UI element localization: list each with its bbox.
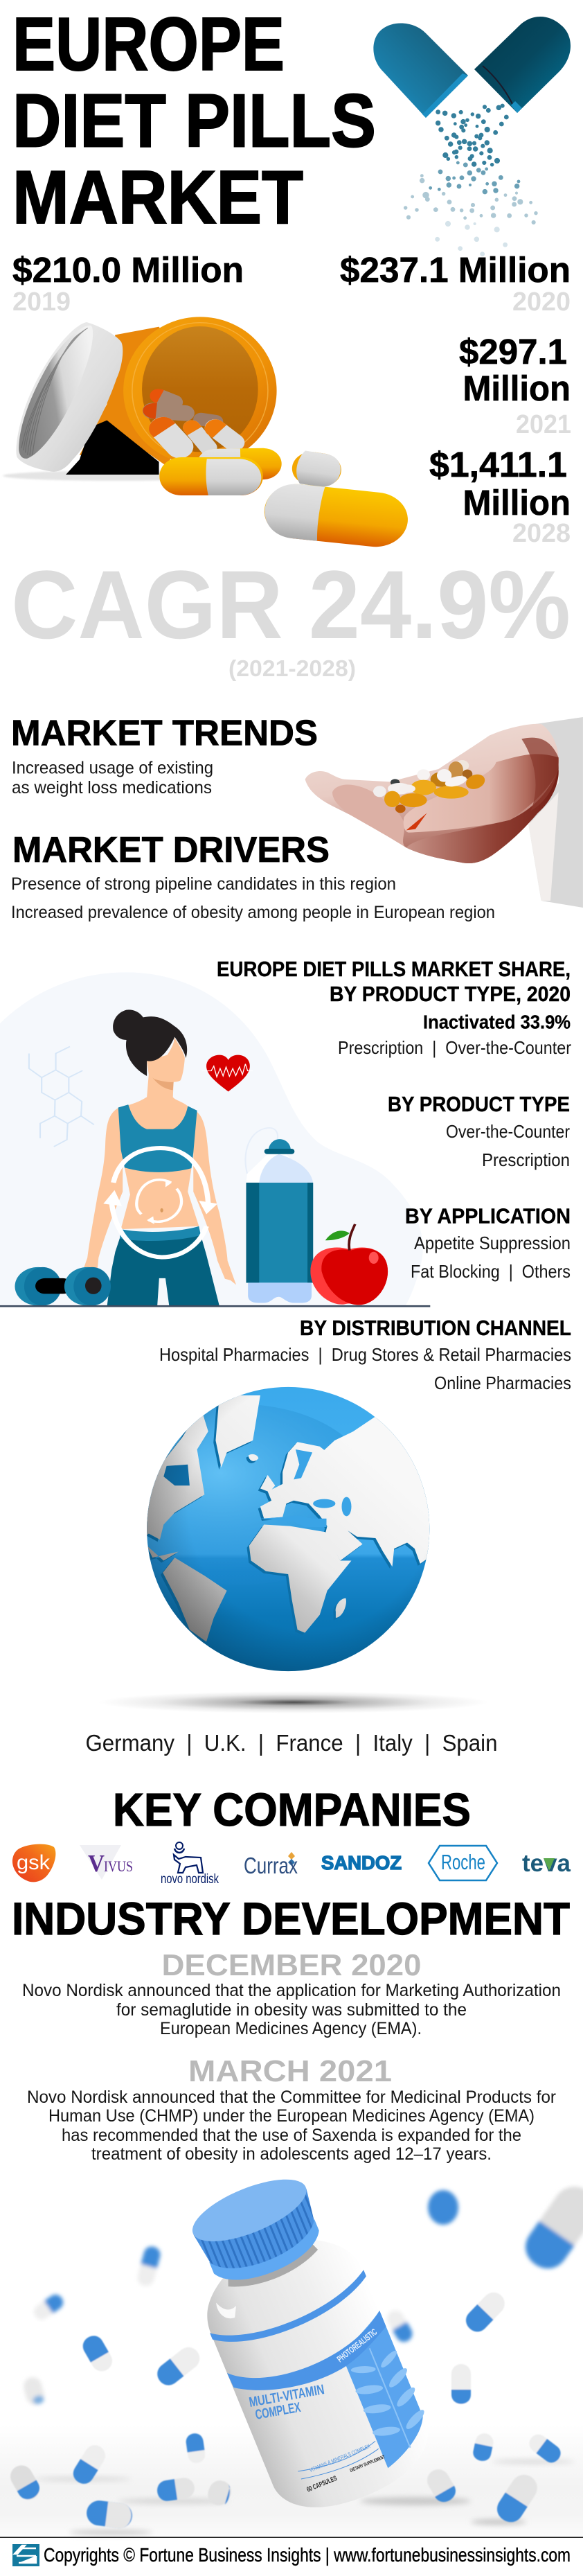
development: March 2021: Novo Nordisk announced that the Committee for Medicinal Products for (27, 2088, 556, 2107)
stat: 2019 value: $210.0 Million (12, 250, 244, 290)
photo: multi-vitamin bottle with scattered capsules: PHOTOREALISTIC (335, 2327, 379, 2364)
development: December 2020: Novo Nordisk announced that the application for Marketing Authorization (22, 1981, 561, 2000)
blurred capsules (21, 2178, 583, 2407)
development: December 2020: for semaglutide in obesity was submitted to the (116, 2000, 467, 2020)
pills in palm (373, 760, 487, 813)
development: December 2020 (22, 1948, 561, 2038)
heading: market trends: MARKET TRENDS (11, 714, 318, 754)
segment: by application (405, 1204, 571, 1282)
bottle: VITAMINS & MINERALS COMPLEX (309, 2443, 371, 2473)
stat: 2028 value: 2028 (512, 519, 571, 548)
development: March 2021: Human Use (CHMP) under the European Medicines Agency (EMA) (48, 2106, 535, 2126)
text: market drivers body: Increased prevalence of obesity among people in European region (11, 903, 495, 922)
heart with pulse (202, 1055, 253, 1092)
text: market drivers body: Presence of strong pipeline candidates in this region (11, 874, 396, 894)
apple (310, 1224, 388, 1305)
stat: 2028 value: Million (463, 483, 571, 522)
icon: open capsule spilling powder (373, 17, 571, 256)
text: market trends body (12, 758, 213, 797)
development: March 2021 (27, 2054, 556, 2164)
title: EUROPE (12, 2, 285, 87)
development: December 2020: DECEMBER 2020 (162, 1948, 421, 1982)
stat: 2021 value (459, 332, 571, 439)
small capsule (289, 449, 344, 489)
text: market trends body: as weight loss medications (12, 778, 212, 797)
bottle: 60 CAPSULES (306, 2475, 339, 2494)
segment: by distribution channel: Online Pharmacies (434, 1373, 571, 1393)
segment: by application: Appetite Suppression (414, 1233, 571, 1253)
stat: 2028 value (429, 445, 571, 548)
segment: by product type (388, 1092, 570, 1170)
capsules inside bottle (142, 387, 249, 463)
weight-loss arrows (103, 1148, 217, 1258)
woman figure (84, 1009, 236, 1306)
footer logo (12, 2544, 39, 2566)
logo: roche: Roche (441, 1850, 485, 1874)
text: share value: Inactivated 33.9% (423, 1012, 571, 1032)
segment: by product type: Prescription (482, 1149, 570, 1170)
logo: gsk (12, 1844, 55, 1882)
sharp capsules (6, 2288, 564, 2530)
globe shadow (98, 1691, 489, 1713)
logo: roche (429, 1846, 497, 1880)
company logos (12, 1842, 571, 1887)
footer rule (0, 2537, 583, 2538)
logo: vivus: V (88, 1850, 105, 1877)
title: DIET PILLS (12, 79, 376, 164)
capsule front left (159, 457, 263, 495)
illustration: orange pill bottle with capsules (3, 317, 411, 550)
stat: 2021 value: $297.1 (459, 332, 567, 371)
bottle: DIETARY SUPPLEMENT (350, 2455, 386, 2473)
stat: 2019 value: 2019 (12, 288, 71, 317)
logo: vivus (80, 1845, 133, 1880)
segment: by distribution channel (159, 1316, 571, 1393)
big capsule (260, 481, 411, 550)
photo: multi-vitamin bottle with scattered capsules (0, 2157, 583, 2537)
title (12, 2, 376, 240)
stat: 2020 value: $237.1 Million (340, 250, 571, 290)
logo: gsk: gsk (17, 1851, 51, 1874)
development: December 2020: European Medicines Agency (EMA). (160, 2019, 422, 2038)
dumbbell (15, 1267, 111, 1305)
logo: novo nordisk (161, 1842, 219, 1887)
photo: multi-vitamin bottle with scattered capsules: COMPLEX (254, 2400, 302, 2423)
title: MARKET (12, 155, 303, 240)
text: market drivers body (11, 874, 495, 922)
logo: novo nordisk: novo nordisk (161, 1872, 219, 1887)
bottle cap (185, 2167, 331, 2295)
logo: teva: teva (522, 1850, 571, 1877)
CAGR figure: CAGR 24.9% (11, 550, 571, 659)
heading: market drivers: MARKET DRIVERS (12, 830, 330, 870)
heading: key companies: KEY COMPANIES (113, 1784, 471, 1836)
stat: 2020 value (340, 250, 571, 317)
text: countries: Germany | U.K. | France | Italy | Spain (86, 1730, 497, 1756)
illustration: woman, dumbbell, water bottle, apple and heart (0, 972, 430, 1307)
development: March 2021: MARCH 2021 (188, 2054, 392, 2088)
segment: by product type: Over-the-Counter (446, 1121, 570, 1142)
photo: multi-vitamin bottle with scattered capsules: MULTI-VITAMIN (248, 2382, 325, 2410)
development: March 2021: treatment of obesity in adolescents aged 12–17 years. (91, 2144, 492, 2164)
bottle (164, 2157, 447, 2528)
heading: market share (217, 957, 571, 1006)
stat: 2021 value: 2021 (516, 410, 571, 439)
logo: sandoz: SANDOZ (321, 1852, 402, 1873)
stat: 2021 value: Million (463, 369, 571, 408)
text: market trends body: Increased usage of existing (12, 758, 213, 777)
logo: vivus: IVUS (104, 1858, 133, 1875)
illustration: globe (147, 1387, 429, 1671)
segment: by application: BY APPLICATION (405, 1204, 571, 1228)
water bottle (245, 1128, 313, 1303)
logo: currax: Currax (244, 1853, 298, 1878)
stat: 2020 value: 2020 (512, 288, 571, 317)
development: March 2021: has recommended that the use of Saxenda is expanded for the (62, 2126, 521, 2145)
CAGR figure: (2021-2028) (228, 655, 356, 681)
photo: gloved hand holding pills (305, 717, 583, 908)
stat: 2028 value: $1,411.1 (429, 445, 567, 484)
molecule (29, 1046, 94, 1147)
stat: 2019 value (12, 250, 244, 317)
capsule behind (197, 448, 282, 481)
